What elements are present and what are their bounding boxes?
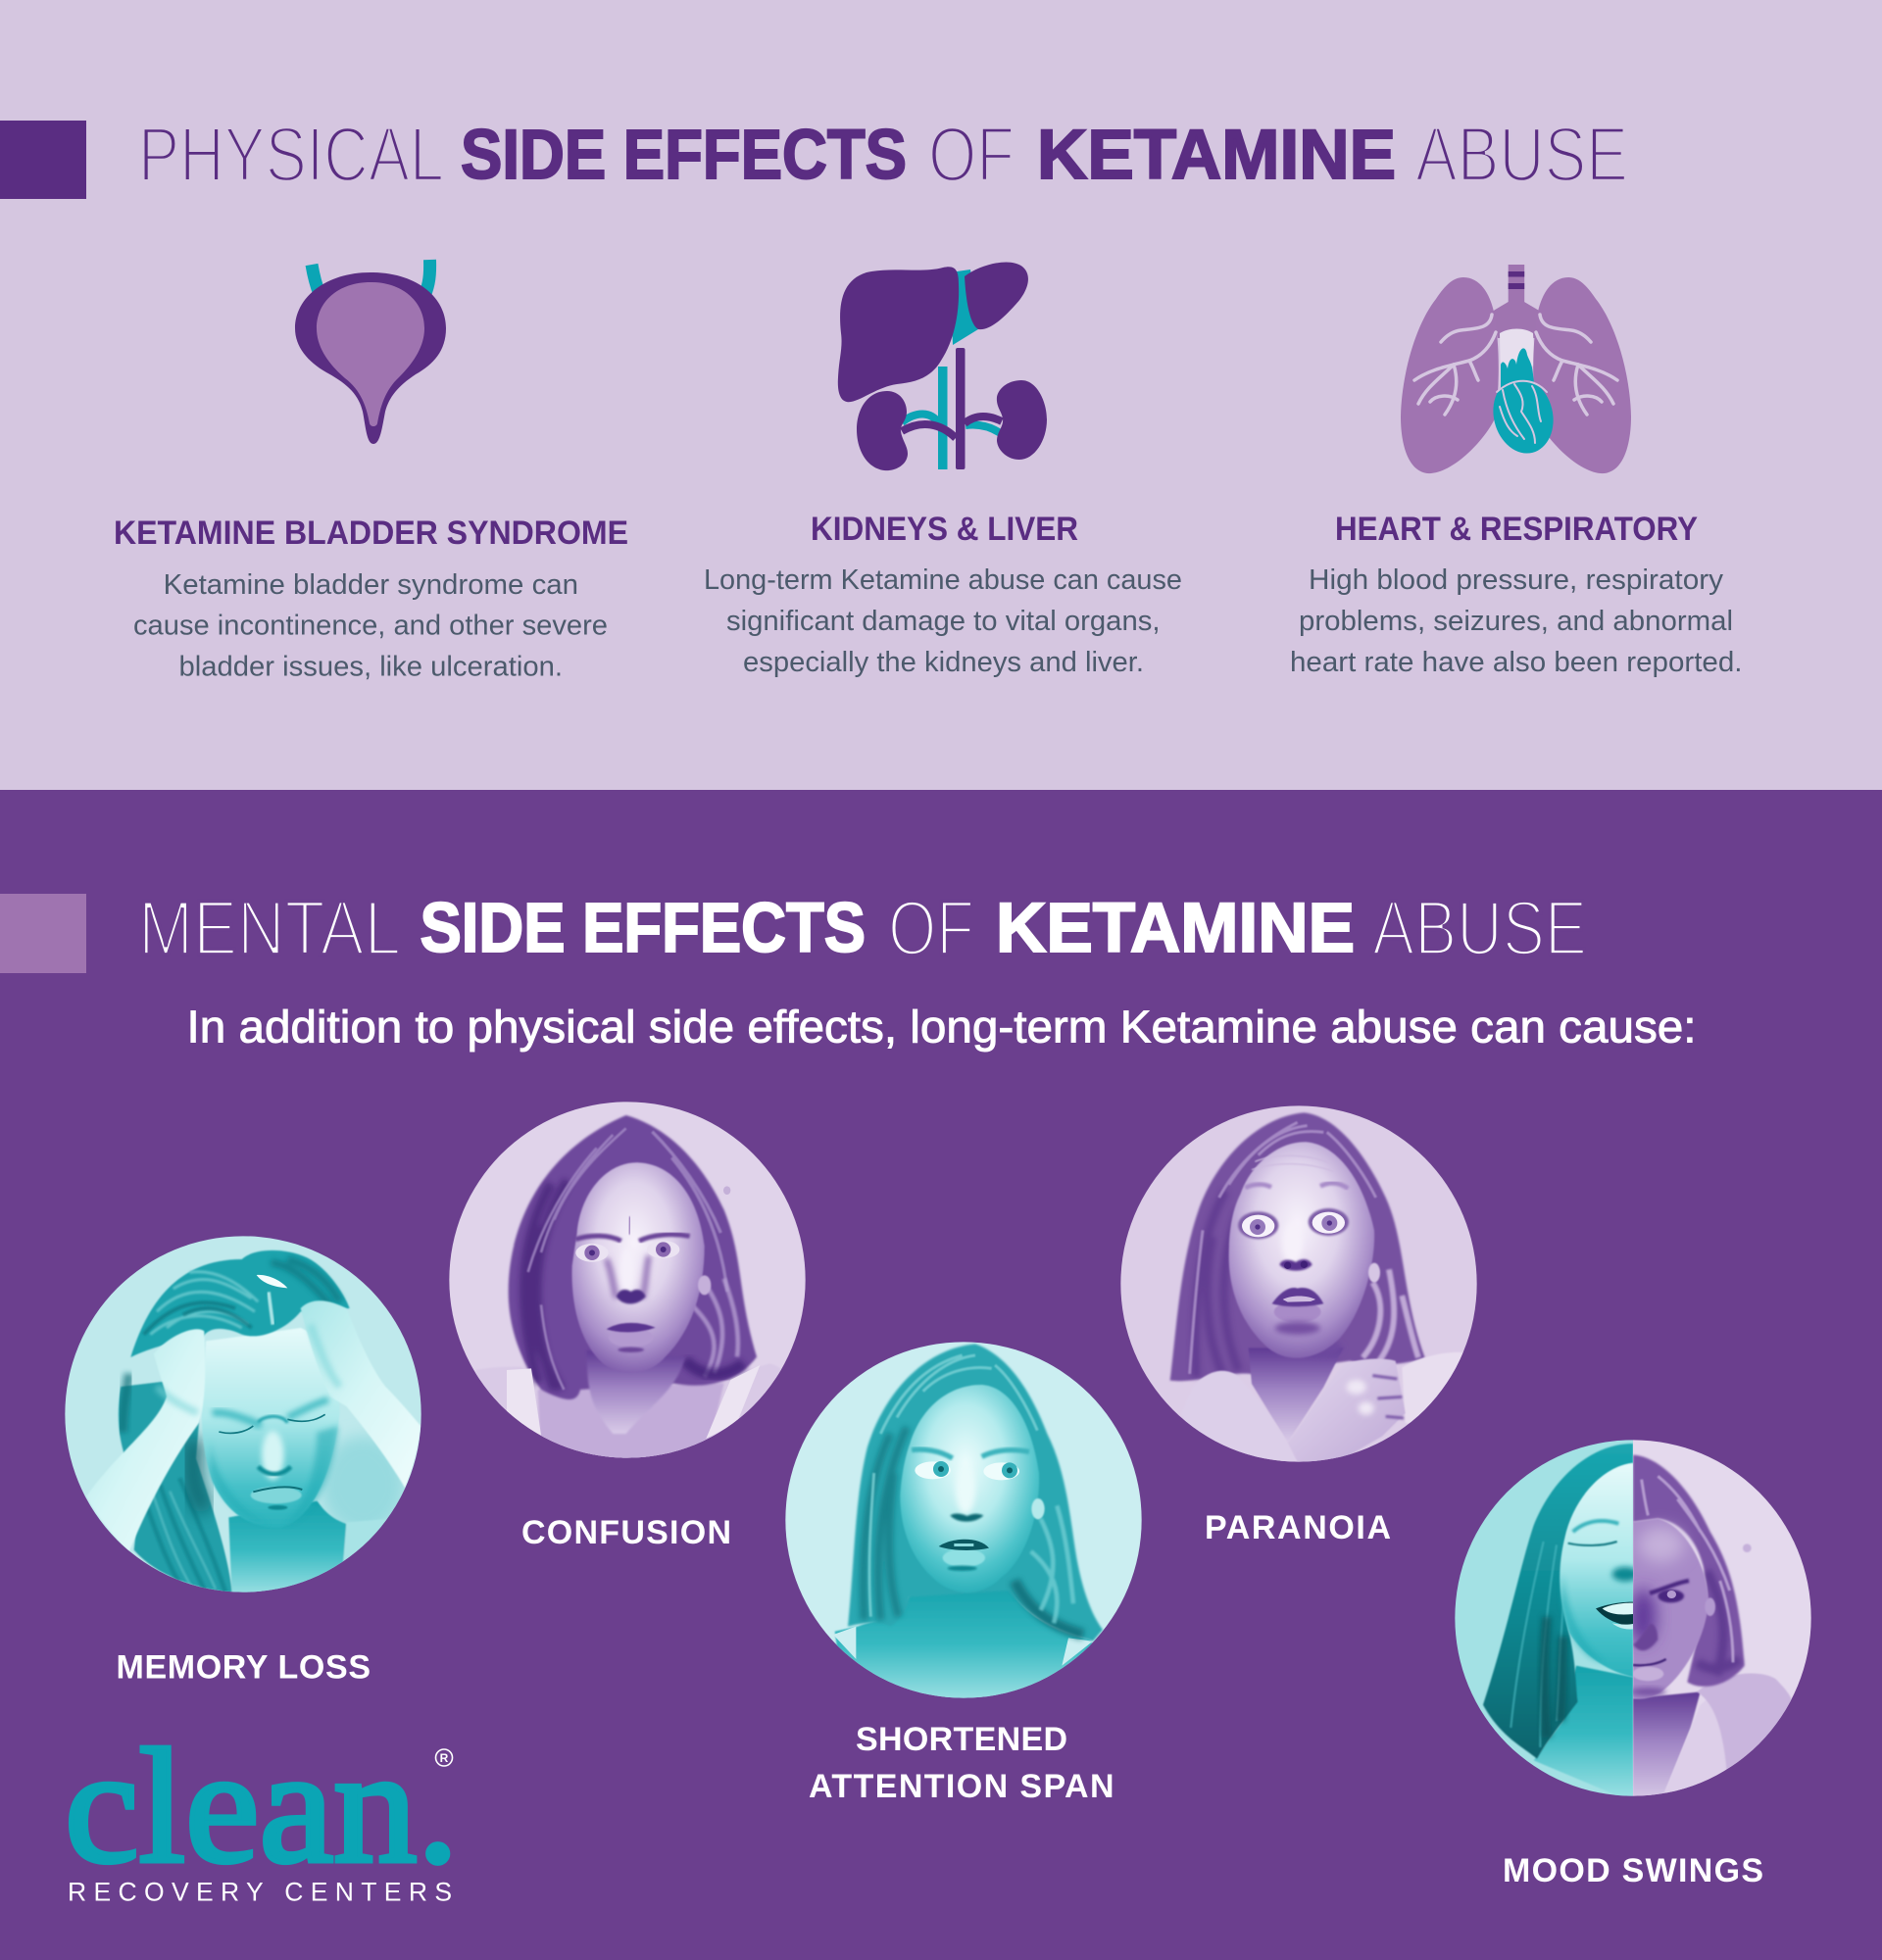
text block: heart and respiratory: HEART & RESPIRATORY [1335,511,1698,548]
text block: kidneys and liver: significant damage to vital organs, [726,606,1161,637]
heading: mental side effects of ketamine abuse: ABUSE [1372,884,1587,971]
label: shortened attention span: SHORTENED [856,1721,1067,1758]
text block: ketamine bladder syndrome: KETAMINE BLADDER SYNDROME [114,514,628,552]
text block: ketamine bladder syndrome: cause incontinence, and other severe [133,610,608,641]
icon: liver and kidneys [838,262,1047,470]
right half: angry purple [1630,1434,1817,1802]
heading: mental side effects of ketamine abuse: OF [888,884,974,971]
icon: bladder [295,260,446,444]
heading: physical side effects of ketamine abuse: SIDE EFFECTS [461,117,907,194]
heading: physical side effects of ketamine abuse: KETAMINE [1037,117,1396,194]
heading: physical side effects of ketamine abuse: ABUSE [1415,111,1628,198]
text block: kidneys and liver: especially the kidneys and liver. [743,647,1144,678]
logo: clean recovery centers: RECOVERY CENTERS [68,1878,452,1907]
logo: clean recovery centers: clean. [65,1716,459,1897]
left half: laughing teal [1449,1434,1638,1802]
panel: physical side effects background [0,0,1882,790]
heading: mental side effects of ketamine abuse: KETAMINE [996,890,1355,967]
label: shortened attention span: ATTENTION SPAN [809,1768,1114,1805]
portrait: memory loss [59,1230,427,1598]
text block: kidneys and liver: KIDNEYS & LIVER [811,511,1078,548]
heading: physical side effects of ketamine abuse: PHYSICAL [138,111,444,198]
portrait: confusion [443,1096,812,1464]
icon: lungs and heart [1401,265,1631,473]
heading: physical side effects of ketamine abuse: OF [928,111,1015,198]
label: shortened attention span [809,1721,1114,1805]
label: paranoia: PARANOIA [1205,1509,1391,1546]
text block: kidneys and liver [704,511,1182,678]
text block: heart and respiratory: heart rate have also been reported. [1290,647,1743,678]
label: mood swings: MOOD SWINGS [1503,1852,1763,1889]
text block: kidneys and liver: Long-term Ketamine abuse can cause [704,564,1182,596]
heading: mental side effects of ketamine abuse: SIDE EFFECTS [420,890,866,967]
logo: clean recovery centers: R [440,1751,449,1765]
heading: mental side effects of ketamine abuse: MENTAL [138,884,401,971]
label: confusion: CONFUSION [521,1514,731,1551]
subtitle: In addition to physical side effects, long-term Ketamine abuse can cause: [186,1002,1696,1053]
label: memory loss: MEMORY LOSS [116,1648,371,1686]
heading marker square: mental [0,894,86,973]
text block: ketamine bladder syndrome: bladder issues, like ulceration. [178,652,563,683]
text block: ketamine bladder syndrome: Ketamine bladder syndrome can [164,569,578,601]
heading: mental side effects of ketamine abuse [138,884,1587,971]
text block: heart and respiratory: problems, seizures, and abnormal [1299,606,1733,637]
text block: heart and respiratory: High blood pressure, respiratory [1309,564,1723,596]
panel: mental side effects background [0,790,1882,1960]
heading: physical side effects of ketamine abuse [138,111,1628,198]
portrait: mood swings (split teal and purple) [1449,1434,1817,1802]
heading marker square: physical [0,121,86,199]
portrait: paranoia [1114,1100,1483,1468]
portrait: shortened attention span [779,1336,1148,1704]
text block: heart and respiratory [1290,511,1743,678]
text block: ketamine bladder syndrome [114,514,628,683]
